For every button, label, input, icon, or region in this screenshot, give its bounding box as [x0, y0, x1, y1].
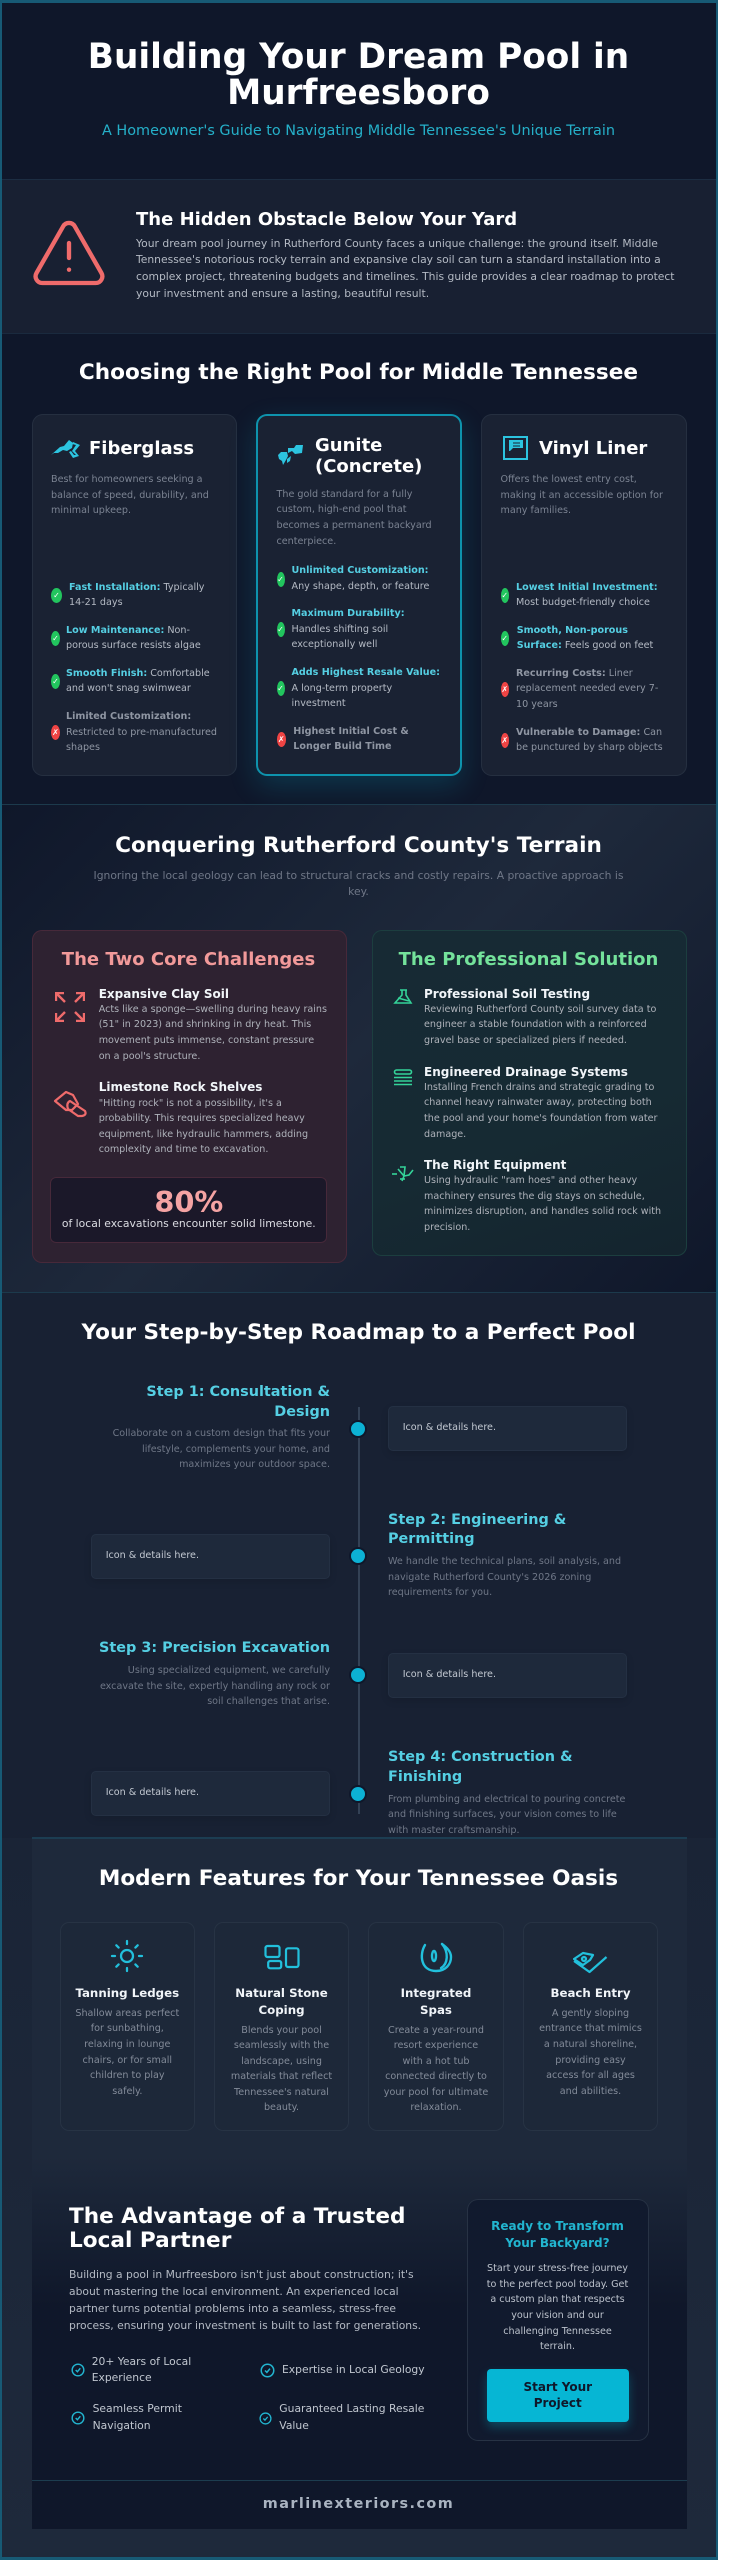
step 3 text: excavate the site, expertly handling any rock or [100, 1681, 330, 1692]
panel: vinyl liner card [481, 414, 687, 776]
title [88, 37, 629, 113]
panel: gunite card: Highest Initial Cost & [293, 726, 409, 736]
panel: gunite card: Handles shifting soil [292, 624, 388, 635]
cta heading: Your Backyard? [505, 2236, 610, 2250]
feature title: Coping [258, 2003, 305, 2017]
cta text: your vision and our [511, 2310, 604, 2321]
panel: fiberglass card: Restricted to pre-manufactured [66, 727, 217, 738]
section: trusted partner: Experience [92, 2371, 152, 2384]
feature text [231, 2024, 332, 2113]
pro: lowest investment: ✓ [501, 591, 508, 600]
callout: call to action [466, 2199, 648, 2441]
section heading: Your Step-by-Step Roadmap to a Perfect Pool [82, 1320, 635, 1345]
pro: smooth finish: ✓ [52, 677, 59, 686]
step 4 text: and finishing surfaces, your vision comes to life [388, 1809, 617, 1820]
timeline dot 4 [349, 1785, 367, 1803]
panel: fiberglass card [32, 414, 237, 776]
icon: stone blocks [264, 1944, 300, 1970]
panel: gunite card: Longer Build Time [293, 741, 392, 752]
section heading: Conquering Rutherford County's Terrain [115, 833, 602, 858]
item text: drainage [424, 1082, 658, 1140]
item text: equipment: precision. [424, 1222, 470, 1233]
section heading: Modern Features for Your Tennessee Oasis [99, 1866, 618, 1891]
cta text: to the perfect pool today. Get [487, 2279, 628, 2290]
item text: soil testing: engineer a stable foundation with a reinforced [424, 1019, 647, 1030]
panel: vinyl liner card: Most budget-friendly choice [516, 597, 650, 608]
step 1 text: maximizes your outdoor space. [179, 1459, 330, 1470]
feature text: children to play [90, 2070, 165, 2081]
card description [51, 474, 209, 516]
panel: integrated spas [368, 1922, 504, 2131]
cta heading: Ready to Transform [491, 2219, 624, 2233]
feature text: A gently sloping [552, 2008, 629, 2019]
feature text: for sunbathing, [91, 2023, 164, 2034]
icon: spa swirl [420, 1942, 452, 1972]
card description: balance of speed, durability, and [51, 490, 209, 501]
step 4 card: Icon & details here. [106, 1787, 199, 1798]
card title [315, 434, 422, 476]
panel: hidden obstacle intro [0, 180, 718, 333]
pro: fast installation: ✓ [53, 591, 60, 600]
panel: gunite card: Unlimited Customization: [292, 565, 429, 576]
step 2 text [388, 1556, 621, 1598]
section: roadmap [0, 1292, 718, 1838]
panel: fiberglass card: shapes [66, 742, 100, 753]
item text: equipment: Using hydraulic "ram hoes" and other heavy [424, 1175, 637, 1186]
feature title: Spas [420, 2003, 452, 2017]
section: modern features [32, 1837, 687, 2157]
feature text: resort experience [394, 2040, 478, 2051]
section heading [69, 2204, 405, 2253]
con: recurring costs [500, 682, 509, 697]
cta text: a custom plan that respects [490, 2294, 625, 2305]
pro: unlimited customization [276, 572, 284, 587]
card description: many families. [500, 505, 571, 516]
cta text: challenging Tennessee [503, 2326, 612, 2337]
item heading: drainage: Engineered Drainage Systems [424, 1065, 628, 1079]
step 3 text [100, 1665, 330, 1707]
item text: limestone: probability. This requires specialized heavy [99, 1113, 305, 1124]
stat caption: of local excavations encounter solid limestone. [62, 1217, 316, 1230]
item text: drainage: the pool and your home's foundation from water [424, 1113, 657, 1124]
section: conquering terrain [0, 804, 718, 1292]
step 2 text: requirements for you. [388, 1587, 492, 1598]
card description: centerpiece. [276, 536, 336, 547]
step 4 text: From plumbing and electrical to pouring concrete [388, 1794, 625, 1804]
section: trusted partner: Expertise in Local Geology [282, 2363, 425, 2376]
item text: clay soil [98, 1004, 327, 1062]
panel: gunite card: A long-term property [292, 683, 392, 694]
title: Murfreesboro [227, 73, 490, 113]
card title: Fiberglass [89, 438, 194, 458]
item text: drainage: Installing French drains and strategic grading to [424, 1082, 654, 1093]
panel: vinyl liner card: Surface: Feels good on feet [517, 640, 653, 651]
feature text: and abilities. [560, 2086, 621, 2097]
step 3 text: Using specialized equipment, we carefully [128, 1665, 330, 1676]
icon: beach entry [573, 1952, 608, 1974]
website: marlinexteriors.com [263, 2496, 454, 2512]
panel: gunite card [256, 414, 462, 776]
item text: limestone: "Hitting rock" is not a possibility, it's a [99, 1098, 282, 1108]
step 4 text [388, 1794, 625, 1836]
feature text: Create a year-round [388, 2024, 484, 2036]
feature text: Shallow areas perfect [75, 2008, 179, 2019]
feature text: your pool for ultimate [384, 2087, 488, 2098]
con: highest cost: ✗ [278, 735, 285, 744]
section: trusted partner: Navigation [93, 2419, 151, 2432]
card description: making it an accessible option for [500, 490, 663, 501]
step 4 title: Finishing [388, 1768, 462, 1784]
section: trusted partner: 20+ Years of Local [92, 2355, 191, 2368]
item heading: soil testing: Professional Soil Testing [424, 987, 590, 1001]
section heading: Local Partner [69, 2228, 231, 2253]
icon: vinyl liner [503, 436, 528, 460]
panel: gunite card: exceptionally well [292, 639, 377, 650]
panel title: The Two Core Challenges [62, 949, 315, 970]
con: vulnerable: ✗ [501, 736, 508, 745]
card description: custom, high-end pool that [276, 504, 406, 515]
intro text: your investment and ensure a lasting, beautiful result. [136, 287, 429, 300]
feature text [539, 2008, 642, 2097]
button [486, 2369, 629, 2422]
feature text: Tennessee's natural [234, 2087, 329, 2098]
pro: low maintenance: ✓ [52, 634, 59, 643]
pro: low maintenance [51, 631, 60, 646]
card description [500, 474, 663, 516]
item text: limestone: equipment, like hydraulic hammers, adding [99, 1129, 308, 1140]
panel: vinyl liner card: Recurring Costs: Liner [516, 668, 633, 678]
feature title: Natural Stone [235, 1986, 328, 2000]
icon: rock tool [54, 1090, 87, 1118]
step 1 text: Collaborate on a custom design that fits your [113, 1428, 330, 1439]
item text: equipment: minimizes disruption, and handles solid rock with [424, 1206, 661, 1217]
icon: gunite [278, 445, 303, 465]
benefit: 20+ years [70, 2363, 84, 2377]
panel: two core challenges [32, 930, 347, 1263]
section: trusted partner: Value [279, 2419, 309, 2432]
timeline dot 1 [349, 1420, 367, 1438]
panel: fiberglass card: 14-21 days [69, 597, 123, 608]
item text: soil testing: gravel base or specialized piers if needed. [424, 1035, 627, 1046]
step 2 title [388, 1512, 566, 1547]
panel: gunite card: Maximum Durability: [292, 608, 405, 619]
step 3 title: Step 3: Precision Excavation [99, 1640, 330, 1656]
pro: maximum durability [276, 622, 284, 637]
icon: sun [110, 1940, 144, 1972]
timeline dot 3 [349, 1666, 367, 1684]
card title: Gunite [315, 434, 382, 456]
callout: 80 percent stat [50, 1177, 327, 1243]
con: recurring costs: ✗ [501, 685, 508, 694]
feature text: connected directly to [385, 2071, 487, 2082]
pro: lowest investment [500, 588, 509, 603]
panel: vinyl liner card: 10 years [516, 699, 558, 710]
feature title: Integrated [401, 1986, 471, 2000]
item text: limestone: complexity and time to excavation. [99, 1144, 268, 1155]
section text: Building a pool in Murfreesboro isn't just about construction; it's [69, 2268, 414, 2281]
panel title: The Professional Solution [399, 949, 658, 970]
panel: vinyl liner card: be punctured by sharp objects [516, 742, 663, 753]
section text: partner turns potential problems into a seamless, stress-free [69, 2302, 396, 2315]
pro: unlimited customization: ✓ [277, 575, 284, 584]
icon: expand arrows [55, 992, 85, 1022]
button: Start Your [523, 2380, 592, 2394]
timeline dot 2 [349, 1547, 367, 1565]
card description: becomes a permanent backyard [276, 520, 432, 531]
item text: clay soil: on a pool's structure. [99, 1051, 200, 1062]
panel: fiberglass card: Limited Customization: [66, 711, 191, 722]
step 1 title [146, 1384, 330, 1420]
item heading: equipment: The Right Equipment [424, 1158, 566, 1172]
subtitle: A Homeowner's Guide to Navigating Middle Tennessee's Unique Terrain [102, 123, 615, 139]
intro text [136, 237, 675, 300]
card description: Best for homeowners seeking a [51, 474, 203, 485]
feature text: a natural shoreline, [544, 2039, 637, 2050]
title: Building Your Dream Pool in [88, 37, 629, 77]
section text: process, ensuring your investment is built to last for generations. [69, 2319, 421, 2332]
item text: drainage: channel heavy rainwater away, protecting both [424, 1097, 652, 1108]
panel: gunite card: Adds Highest Resale Value: [292, 667, 440, 678]
step 1 text: lifestyle, complements your home, and [142, 1444, 330, 1455]
panel: gunite card: Any shape, depth, or feature [292, 581, 429, 592]
con: limited customization [51, 725, 60, 740]
intro text: Tennessee's notorious rocky terrain and expansive clay soil can turn a standard installation into a [136, 253, 661, 266]
pro: resale value [276, 681, 284, 696]
feature text: materials that reflect [231, 2071, 332, 2082]
pro: maximum durability: ✓ [277, 625, 284, 634]
step 1 title: Design [274, 1404, 330, 1420]
item text: limestone [99, 1098, 308, 1155]
button: Project [534, 2396, 582, 2410]
feature text: with a hot tub [402, 2056, 470, 2067]
step 2 text: navigate Rutherford County's 2026 zoning [388, 1572, 591, 1583]
section: trusted partner [32, 2157, 687, 2529]
cta text: Start your stress-free journey [487, 2263, 628, 2274]
item text: equipment: machinery ensures the dig stays on schedule, [424, 1191, 645, 1202]
feature text [384, 2024, 488, 2113]
pro: smooth surface [500, 631, 509, 646]
icon: soil test flask [393, 989, 412, 1004]
panel: vinyl liner card: Vulnerable to Damage: Can [516, 726, 662, 738]
cta text [466, 2261, 648, 2355]
header [0, 0, 718, 180]
card title: Vinyl Liner [539, 438, 647, 458]
panel: gunite card: investment [292, 698, 346, 709]
section subtitle [94, 869, 623, 898]
feature title [235, 1986, 328, 2017]
panel: fiberglass card: Low Maintenance: Non- [66, 624, 190, 636]
feature text: providing easy [555, 2055, 626, 2066]
feature text: relaxation. [410, 2102, 462, 2113]
step 1 card: Icon & details here. [403, 1422, 496, 1433]
intro text: Your dream pool journey in Rutherford County faces a unique challenge: the ground itself. Middle [136, 237, 658, 250]
feature text: relaxing in lounge [84, 2039, 170, 2050]
step 1 text [113, 1428, 330, 1470]
item heading: limestone: Limestone Rock Shelves [99, 1080, 262, 1094]
section text [69, 2268, 421, 2332]
section text: about mastering the local environment. An experienced local [69, 2285, 399, 2298]
panel: vinyl liner card: replacement needed every 7- [516, 683, 658, 694]
card description: Offers the lowest entry cost, [500, 474, 637, 485]
section: choosing the right pool [0, 333, 718, 804]
item text: clay soil: Acts like a sponge—swelling during heavy rains [99, 1004, 327, 1015]
benefit: permit navigation [70, 2411, 84, 2425]
step 3 text: soil challenges that arise. [207, 1696, 330, 1707]
pro: smooth surface: ✓ [501, 634, 508, 643]
panel: fiberglass card: Smooth Finish: Comfortable [66, 668, 210, 678]
panel: vinyl liner card: Lowest Initial Investment: [516, 582, 658, 592]
con: vulnerable [500, 733, 509, 748]
item text: drainage: damage. [424, 1129, 466, 1140]
con: limited customization: ✗ [52, 728, 59, 737]
stat value: 80% [154, 1185, 223, 1219]
pro: fast installation [51, 588, 62, 603]
icon: fiberglass [51, 440, 80, 458]
step 4 card [91, 1771, 330, 1816]
step 2 card: Icon & details here. [106, 1550, 199, 1561]
footer [32, 2480, 687, 2529]
panel: professional solution [372, 930, 687, 1256]
step 3 card: Icon & details here. [403, 1669, 496, 1680]
card description: minimal upkeep. [51, 505, 131, 516]
step 2 card [91, 1534, 330, 1579]
section subtitle: Ignoring the local geology can lead to structural cracks and costly repairs. A proactive approach is [94, 869, 623, 882]
benefit: local geology [260, 2363, 274, 2378]
panel: fiberglass card: and won't snag swimwear [66, 683, 191, 694]
con: highest cost [276, 732, 286, 747]
step 3 card [388, 1652, 627, 1698]
feature text: beauty. [264, 2102, 299, 2113]
step 4 title [388, 1749, 573, 1784]
step 1 card [388, 1406, 627, 1451]
feature title: Tanning Ledges [75, 1986, 179, 2000]
step 2 title: Step 2: Engineering & [388, 1512, 566, 1528]
icon: warning triangle [33, 220, 105, 286]
section heading: Choosing the Right Pool for Middle Tennessee [79, 360, 638, 385]
step 1 title: Step 1: Consultation & [146, 1384, 330, 1400]
feature text: seamlessly with the [234, 2040, 329, 2051]
panel: fiberglass card: porous surface resists algae [66, 640, 201, 651]
item text: clay soil: movement puts immense, constant pressure [99, 1035, 314, 1046]
feature title: Beach Entry [550, 1986, 631, 2000]
feature text: access for all ages [546, 2070, 635, 2081]
feature text: chairs, or for small [82, 2055, 172, 2066]
feature text: landscape, using [241, 2056, 322, 2067]
step 4 title: Step 4: Construction & [388, 1749, 573, 1765]
feature title [401, 1986, 471, 2017]
step 2 title: Permitting [388, 1531, 475, 1547]
panel: beach entry [523, 1922, 658, 2131]
panel: natural stone coping [214, 1922, 349, 2131]
section heading: The Advantage of a Trusted [69, 2204, 405, 2229]
feature text: entrance that mimics [539, 2023, 642, 2034]
cta heading [466, 2218, 648, 2252]
item heading: clay soil: Expansive Clay Soil [99, 987, 229, 1001]
item text: soil testing [424, 1004, 656, 1046]
step 4 text: with master craftsmanship. [388, 1825, 520, 1836]
icon: drainage lines [394, 1069, 412, 1086]
item text: clay soil: (51" in 2023) and shrinking in dry heat. This [99, 1019, 311, 1030]
panel: fiberglass card: Fast Installation: Typically [69, 582, 204, 592]
icon: equipment [392, 1166, 414, 1182]
feature text: Blends your pool [241, 2024, 322, 2036]
panel: tanning ledges [60, 1922, 195, 2131]
cta text: terrain. [540, 2341, 575, 2352]
benefit: resale value [259, 2412, 272, 2425]
intro text: complex project, threatening budgets and timelines. This guide provides a clear roadmap to protect [136, 270, 675, 283]
section: trusted partner: Guaranteed Lasting Resale [279, 2402, 424, 2415]
card description: The gold standard for a fully [276, 489, 412, 500]
panel: vinyl liner card: Smooth, Non-porous [517, 624, 628, 636]
feature text: safely. [112, 2086, 142, 2097]
step 2 text: We handle the technical plans, soil analysis, and [388, 1556, 621, 1567]
section: trusted partner: Seamless Permit [93, 2402, 182, 2415]
card description [276, 489, 432, 547]
section subtitle: key. [348, 885, 369, 898]
pro: resale value: ✓ [277, 684, 284, 693]
feature text [75, 2008, 179, 2097]
item text: soil testing: Reviewing Rutherford County soil survey data to [424, 1004, 656, 1015]
pro: smooth finish [51, 674, 60, 689]
item text: equipment [424, 1175, 661, 1233]
intro heading: The Hidden Obstacle Below Your Yard [136, 209, 517, 230]
timeline line [358, 1407, 360, 1814]
card title: (Concrete) [315, 456, 422, 476]
